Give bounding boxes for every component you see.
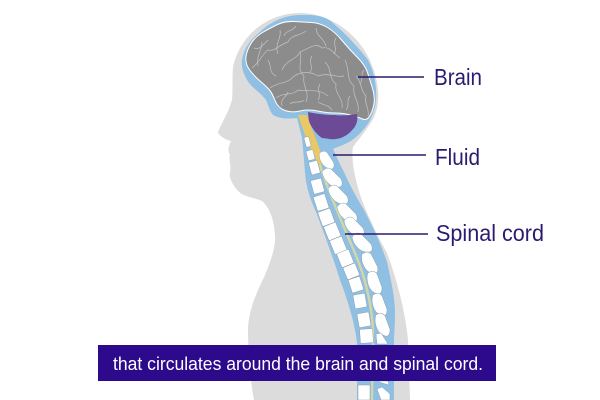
label: Brain: Brain: [434, 64, 482, 90]
brain folds: [252, 26, 368, 116]
label: Spinal cord: Spinal cord: [436, 220, 544, 246]
body silhouette: [218, 13, 410, 400]
brain: [246, 21, 374, 120]
fluid layer: [242, 15, 395, 400]
cerebellum: [308, 112, 357, 139]
label: Fluid: Fluid: [435, 144, 480, 170]
spinous processes: [316, 150, 396, 400]
vertebrae: [304, 136, 373, 400]
spinal cord: [320, 165, 373, 400]
brainstem: [298, 115, 322, 175]
label: Brain: [358, 64, 482, 90]
caption bar: [98, 345, 496, 381]
caption bar: that circulates around the brain and spinal cord.: [113, 354, 483, 374]
